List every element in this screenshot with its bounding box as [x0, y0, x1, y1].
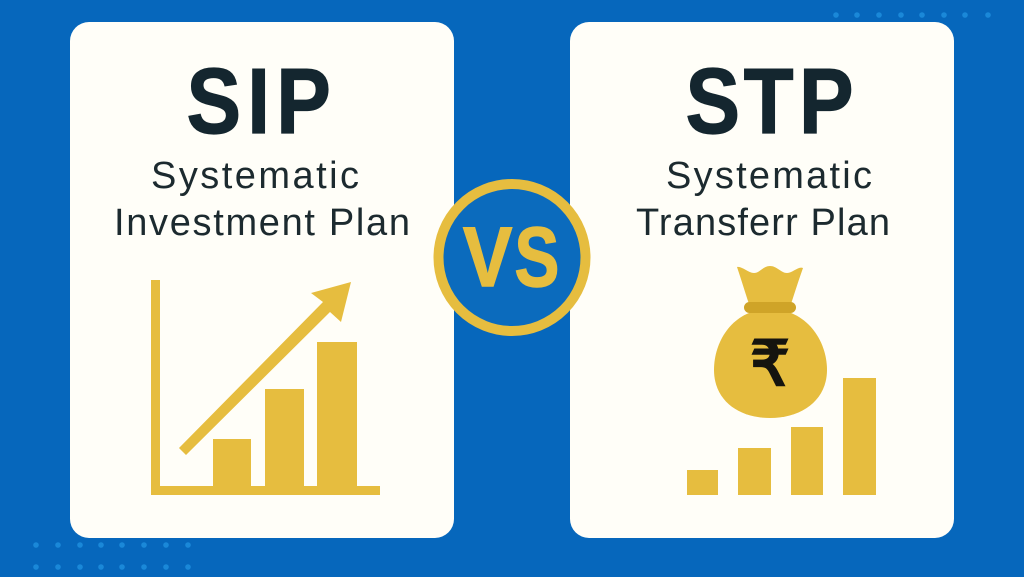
STP card background — [570, 22, 954, 538]
SIP subtitle — [114, 155, 410, 244]
SIP card background — [70, 22, 454, 538]
SIP subtitle: Systematic — [151, 155, 359, 197]
bag tie band — [744, 302, 796, 313]
VS badge — [438, 184, 586, 331]
icon: rupee money bag — [714, 266, 827, 418]
panel: SIP — [70, 22, 454, 538]
STP subtitle: Transferr Plan — [636, 202, 890, 244]
VS label: V — [463, 210, 513, 304]
VS label: S — [514, 211, 559, 305]
STP heading: STP — [686, 49, 854, 153]
VS label — [463, 210, 559, 305]
chart axes — [151, 280, 380, 495]
chart bars — [213, 342, 357, 489]
SIP subtitle: Investment Plan — [114, 202, 410, 244]
chart: rising bars with arrow — [151, 280, 380, 495]
STP subtitle: Systematic — [666, 155, 872, 197]
bag neck — [737, 266, 803, 304]
dot pattern: top right — [833, 12, 991, 18]
panel: STP — [570, 22, 954, 538]
SIP heading: SIP — [186, 49, 331, 153]
bag body — [714, 309, 827, 418]
STP subtitle — [636, 155, 890, 244]
growth arrow — [179, 282, 351, 455]
rupee symbol: ₹ — [750, 330, 790, 399]
dot pattern: bottom left — [33, 542, 191, 570]
bar chart — [687, 378, 876, 495]
badge ring — [438, 184, 586, 331]
